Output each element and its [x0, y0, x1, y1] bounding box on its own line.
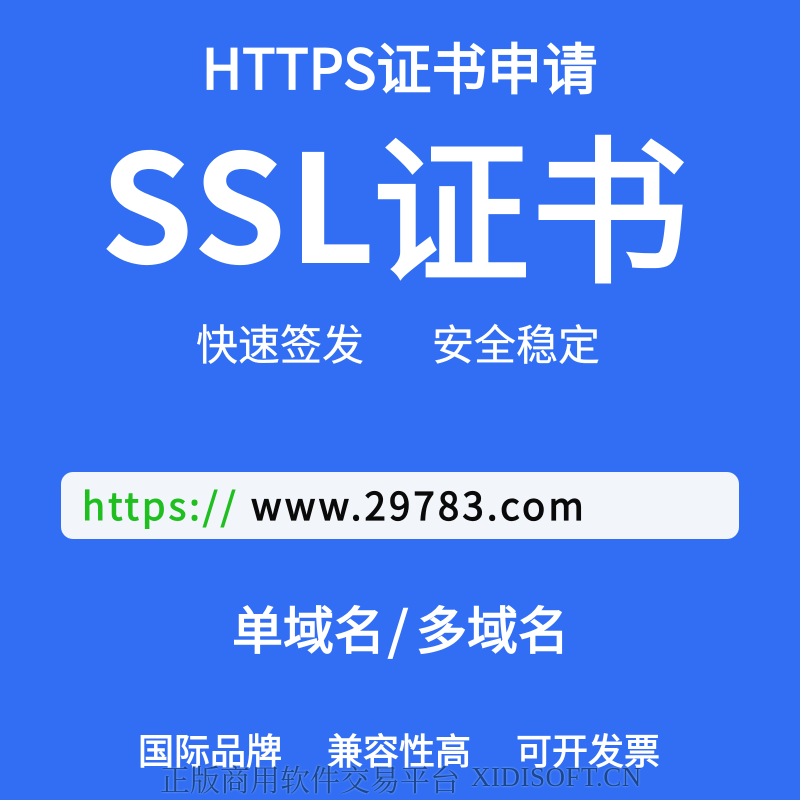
benefit: invoices available: 可开发票 — [516, 723, 660, 775]
url protocol: https:// — [82, 476, 239, 531]
domain types heading: 单域名/多域名 — [232, 590, 569, 664]
top heading: HTTPS证书申请 — [202, 25, 598, 105]
url domain: www.29783.com — [251, 476, 587, 531]
watermark latin: XIDISOFT.CN — [471, 762, 642, 792]
feature tagline: fast issuance: 快速签发 — [196, 312, 364, 373]
main title latin: SSL — [100, 90, 377, 307]
watermark: 正版商用软件交易平台 — [160, 756, 460, 800]
main title chinese: 证书 — [372, 86, 690, 315]
url bar — [61, 472, 739, 539]
benefit: international brands: 国际品牌 — [138, 723, 282, 775]
feature tagline: secure and stable: 安全稳定 — [432, 312, 600, 373]
benefit: high compatibility: 兼容性高 — [327, 723, 471, 775]
